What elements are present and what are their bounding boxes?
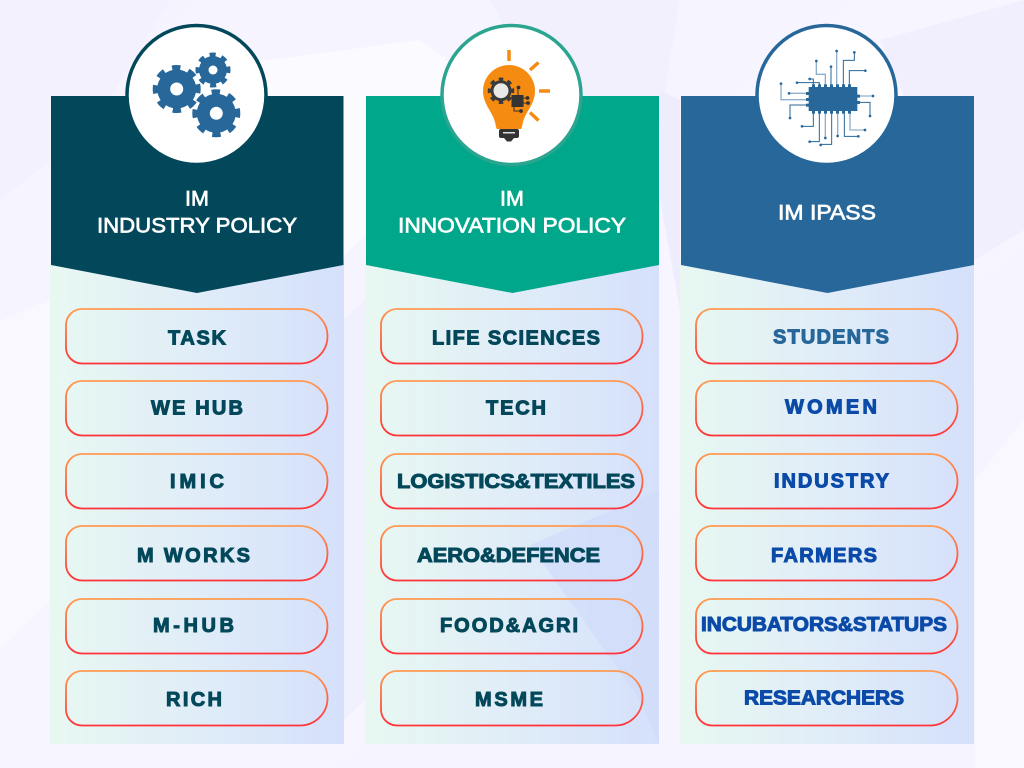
item: RESEARCHERS: RESEARCHERS bbox=[744, 688, 904, 710]
item: IMIC: IMIC bbox=[170, 471, 224, 493]
item: M WORKS bbox=[66, 526, 328, 580]
item: WOMEN bbox=[696, 381, 957, 436]
item: FARMERS bbox=[696, 526, 957, 580]
panel: IM Industry Policy: INDUSTRY POLICY bbox=[97, 214, 297, 238]
item: TASK: TASK bbox=[168, 328, 227, 350]
item: LOGISTICS&TEXTILES: LOGISTICS&TEXTILES bbox=[397, 471, 635, 493]
item: FOOD&AGRI bbox=[381, 599, 642, 654]
header banner bbox=[681, 96, 974, 293]
item: LOGISTICS&TEXTILES bbox=[381, 454, 642, 508]
heading: IM IPASS bbox=[778, 200, 876, 224]
item: WE HUB bbox=[66, 381, 328, 436]
panel: IM Innovation Policy: INNOVATION POLICY bbox=[398, 214, 626, 238]
item: WOMEN: WOMEN bbox=[785, 396, 877, 418]
item: MSME bbox=[381, 671, 642, 726]
panel body bbox=[50, 260, 344, 744]
item: STUDENTS: STUDENTS bbox=[773, 326, 889, 348]
panel body bbox=[365, 260, 659, 744]
panel: IM Innovation Policy bbox=[365, 26, 659, 744]
item: INCUBATORS&STATUPS bbox=[696, 599, 957, 654]
heading: IM bbox=[500, 186, 524, 210]
item: M-HUB: M-HUB bbox=[153, 615, 234, 637]
item: FARMERS: FARMERS bbox=[771, 545, 877, 567]
header banner bbox=[366, 96, 659, 293]
item: WE HUB: WE HUB bbox=[151, 398, 243, 420]
panel: IM Industry Policy bbox=[50, 26, 344, 744]
item: M WORKS: M WORKS bbox=[137, 545, 250, 567]
item: LIFE SCIENCES bbox=[381, 309, 642, 364]
header banner bbox=[51, 96, 344, 293]
item: TECH bbox=[381, 381, 642, 436]
item: AERO&DEFENCE bbox=[381, 526, 642, 580]
icon: gears bbox=[127, 26, 266, 164]
item: IMIC bbox=[66, 454, 328, 508]
item: STUDENTS bbox=[696, 309, 957, 364]
item: INDUSTRY: INDUSTRY bbox=[774, 470, 890, 492]
item: RICH bbox=[66, 671, 328, 726]
background facet bbox=[530, 490, 659, 744]
item: INDUSTRY bbox=[696, 454, 957, 508]
heading: IM bbox=[185, 186, 209, 210]
item: RESEARCHERS bbox=[696, 671, 957, 726]
panel: IM IPASS bbox=[680, 26, 974, 744]
item: M-HUB bbox=[66, 599, 327, 654]
item: MSME: MSME bbox=[475, 689, 543, 711]
item: TASK bbox=[66, 309, 328, 364]
item: AERO&DEFENCE: AERO&DEFENCE bbox=[417, 545, 600, 567]
panel body bbox=[680, 260, 974, 744]
item: RICH: RICH bbox=[166, 689, 222, 711]
item: LIFE SCIENCES: LIFE SCIENCES bbox=[432, 328, 600, 350]
icon: light bulb bbox=[442, 26, 581, 164]
item: TECH: TECH bbox=[486, 398, 546, 420]
icon: circuit chip bbox=[757, 26, 896, 164]
item: INCUBATORS&STATUPS: INCUBATORS&STATUPS bbox=[701, 614, 947, 636]
item: FOOD&AGRI: FOOD&AGRI bbox=[440, 615, 578, 637]
